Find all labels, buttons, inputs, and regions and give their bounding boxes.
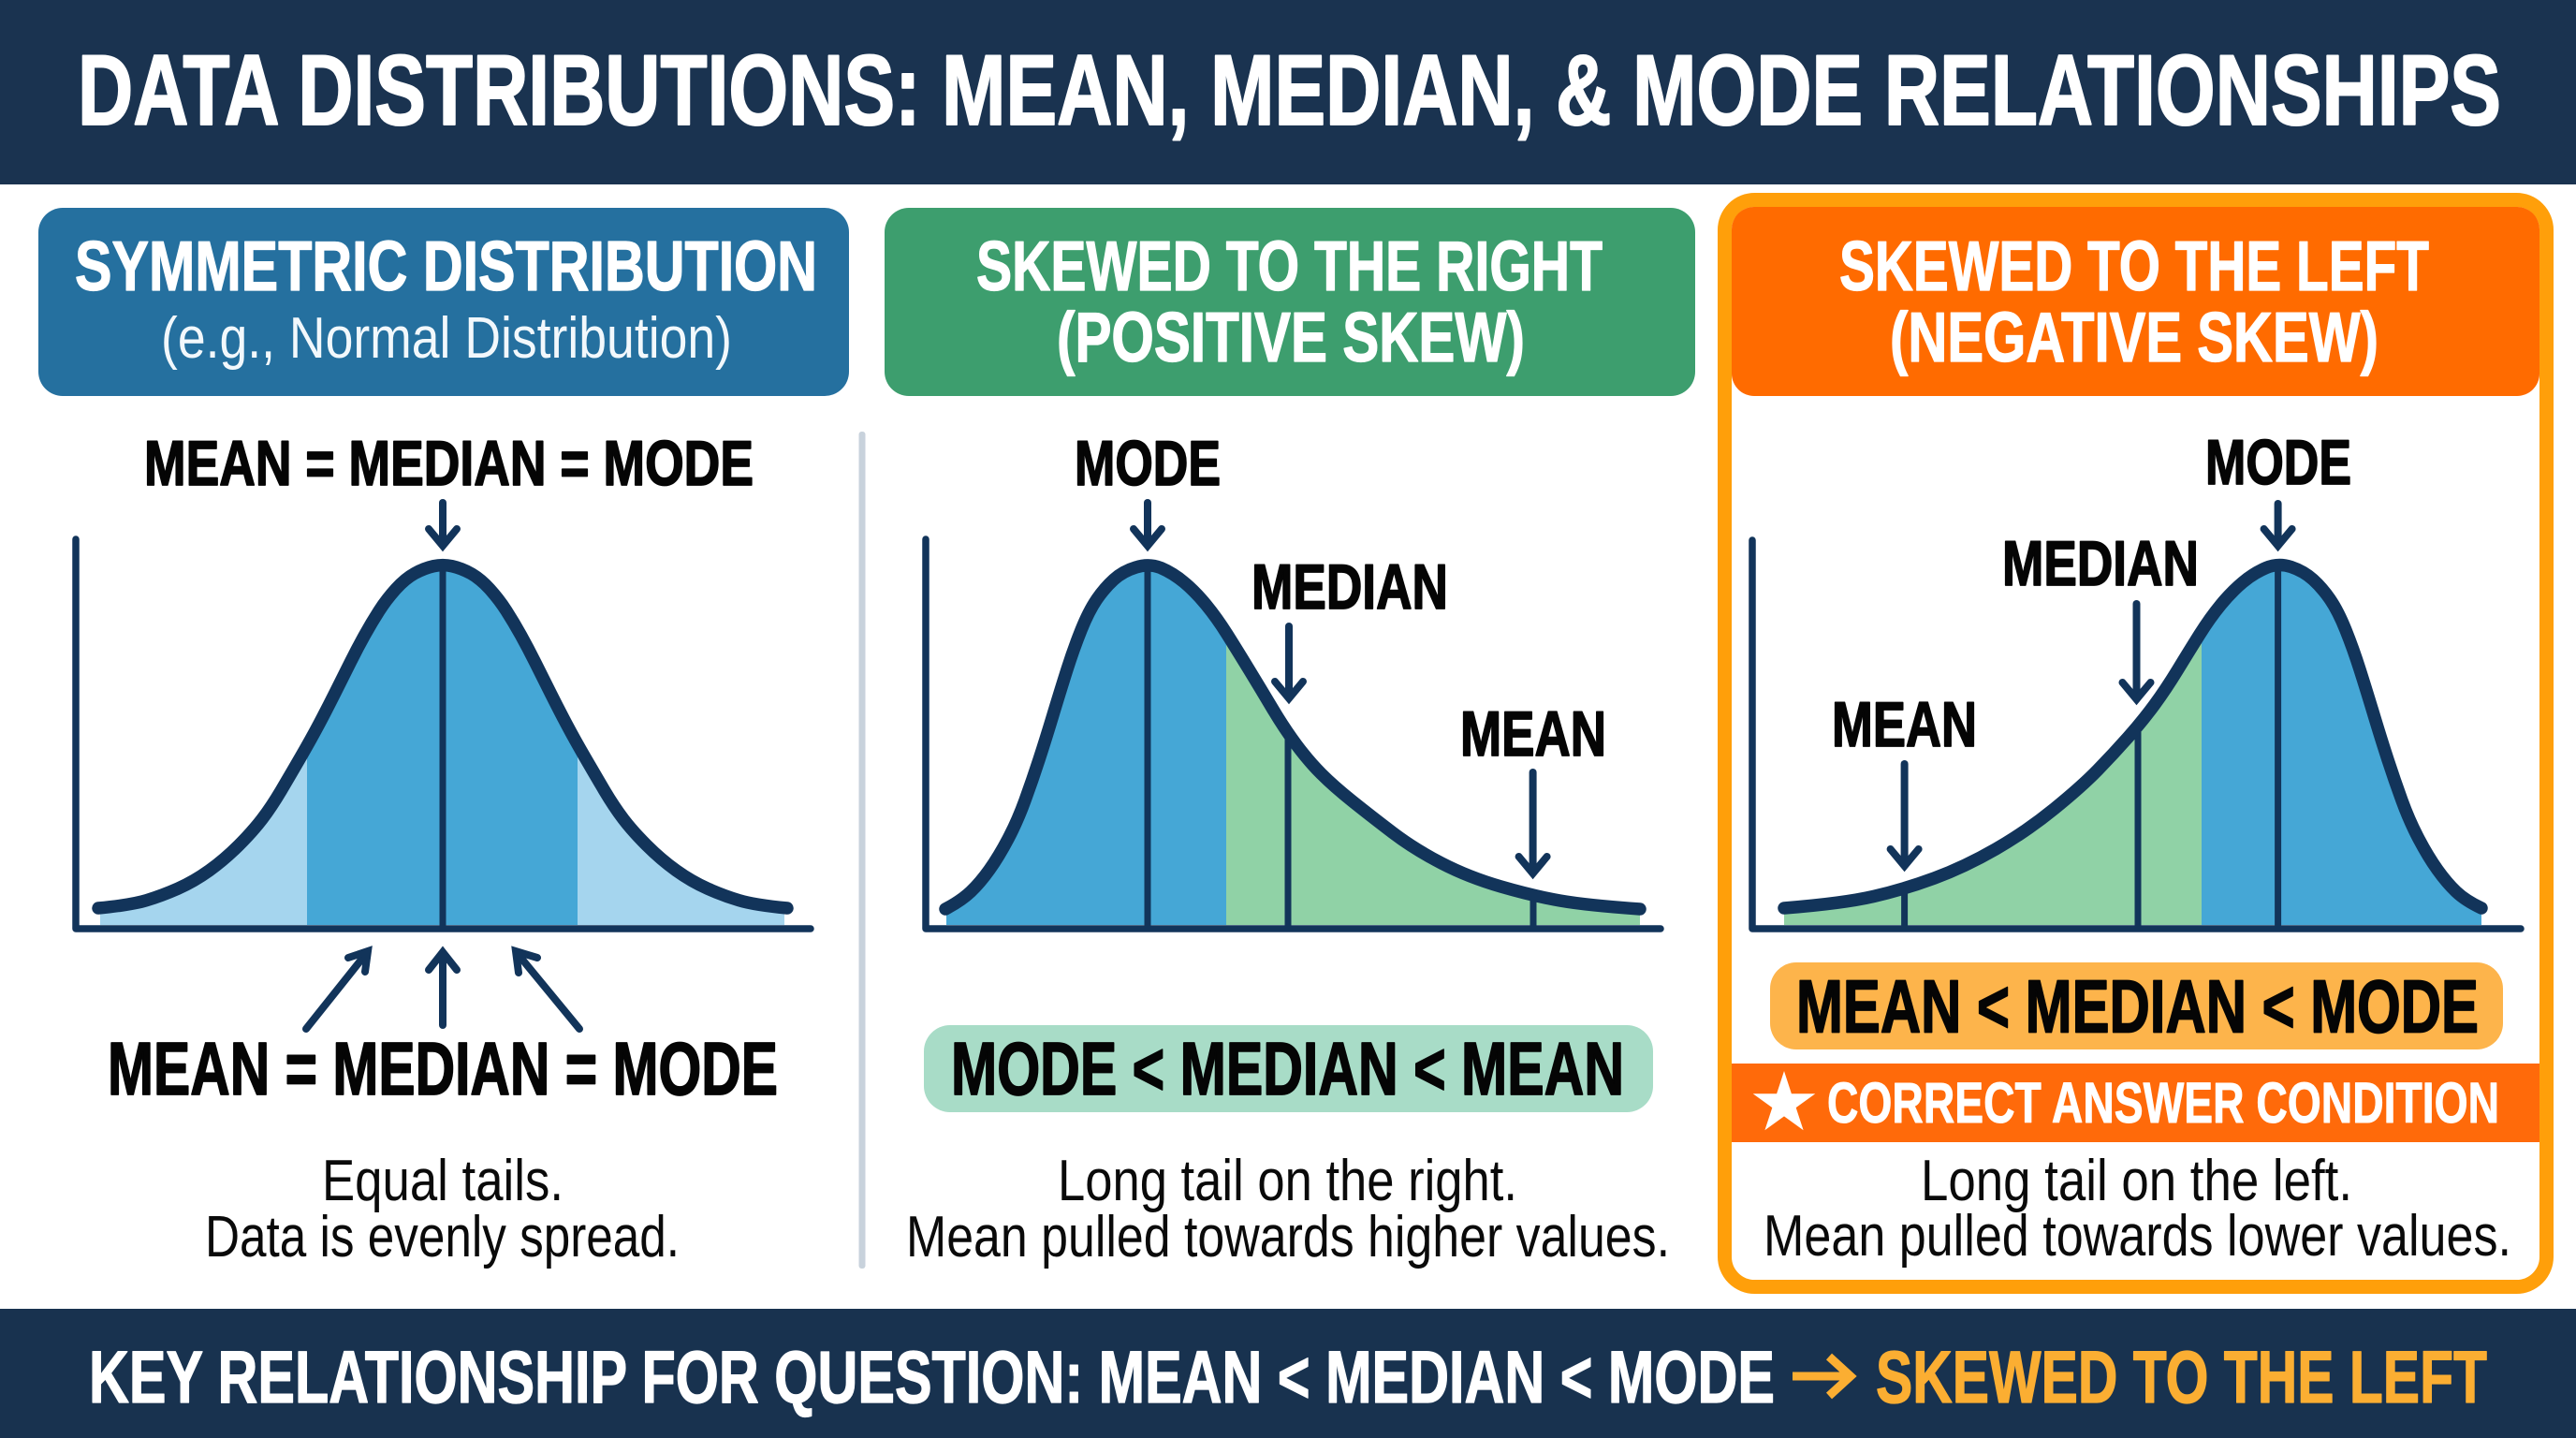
description: left skew: [1764, 1149, 2511, 1269]
heading: skewed to the right: SKEWED TO THE RIGHT: [976, 227, 1603, 305]
description: left skew: Long tail on the left.: [1921, 1149, 2352, 1213]
panel: skewed to the right: [885, 208, 1695, 1269]
description: symmetric: [205, 1149, 680, 1269]
label: median: MEDIAN: [1251, 551, 1448, 623]
chart: right-skewed curve: [926, 539, 1661, 929]
label: mean: MEAN: [1460, 698, 1606, 770]
arrow: mean: [1891, 764, 1919, 866]
footer banner: key relationship: [0, 1309, 2576, 1438]
chart: left-skewed curve: [1752, 540, 2521, 929]
arrow: median: [2123, 604, 2151, 699]
arrows: pointing up to the centre: [306, 951, 579, 1029]
heading: symmetric distribution: SYMMETRIC DISTRIBUTION: [75, 227, 817, 305]
heading: symmetric distribution: (e.g., Normal Distribution): [161, 306, 732, 371]
heading: skewed to the left: [1732, 207, 2539, 396]
icon: star: [1753, 1071, 1815, 1130]
relation: mean = median = mode: MEAN = MEDIAN = MODE: [108, 1027, 778, 1110]
relation pill: mode < median < mean: MODE < MEDIAN < MEAN: [951, 1027, 1624, 1110]
footer text: KEY RELATIONSHIP FOR QUESTION: MEAN < MEDIAN < MODE: [89, 1335, 1775, 1418]
top label: mean = median = mode: MEAN = MEDIAN = MODE: [144, 428, 754, 499]
heading: skewed to the right: (POSITIVE SKEW): [1057, 298, 1525, 376]
label: mean: MEAN: [1832, 689, 1977, 760]
arrow: peak: [429, 503, 457, 546]
label: mode: MODE: [2205, 427, 2351, 498]
panel: symmetric distribution: [38, 208, 849, 1269]
heading: symmetric distribution: [38, 208, 849, 396]
panel: skewed to the left (highlighted): [1724, 200, 2546, 1286]
arrow: mode: [1134, 503, 1162, 546]
label: mode: MODE: [1075, 428, 1221, 499]
banner: correct answer condition: [1732, 1064, 2539, 1142]
title banner: [0, 0, 2576, 184]
description: right skew: Mean pulled towards higher values.: [906, 1205, 1670, 1269]
arrow: mean: [1519, 772, 1547, 873]
arrow: mode: [2264, 504, 2292, 546]
heading: skewed to the left: (NEGATIVE SKEW): [1890, 298, 2378, 376]
label: median: MEDIAN: [2002, 528, 2199, 599]
chart: symmetric bell curve: [76, 539, 811, 929]
heading: skewed to the right: [885, 208, 1695, 396]
description: right skew: [906, 1149, 1670, 1269]
arrow: leads to: [1793, 1357, 1851, 1396]
description: right skew: Long tail on the right.: [1058, 1149, 1517, 1213]
description: symmetric: Equal tails.: [322, 1149, 564, 1213]
arrow: median: [1275, 626, 1303, 698]
description: symmetric: Data is evenly spread.: [205, 1205, 680, 1269]
